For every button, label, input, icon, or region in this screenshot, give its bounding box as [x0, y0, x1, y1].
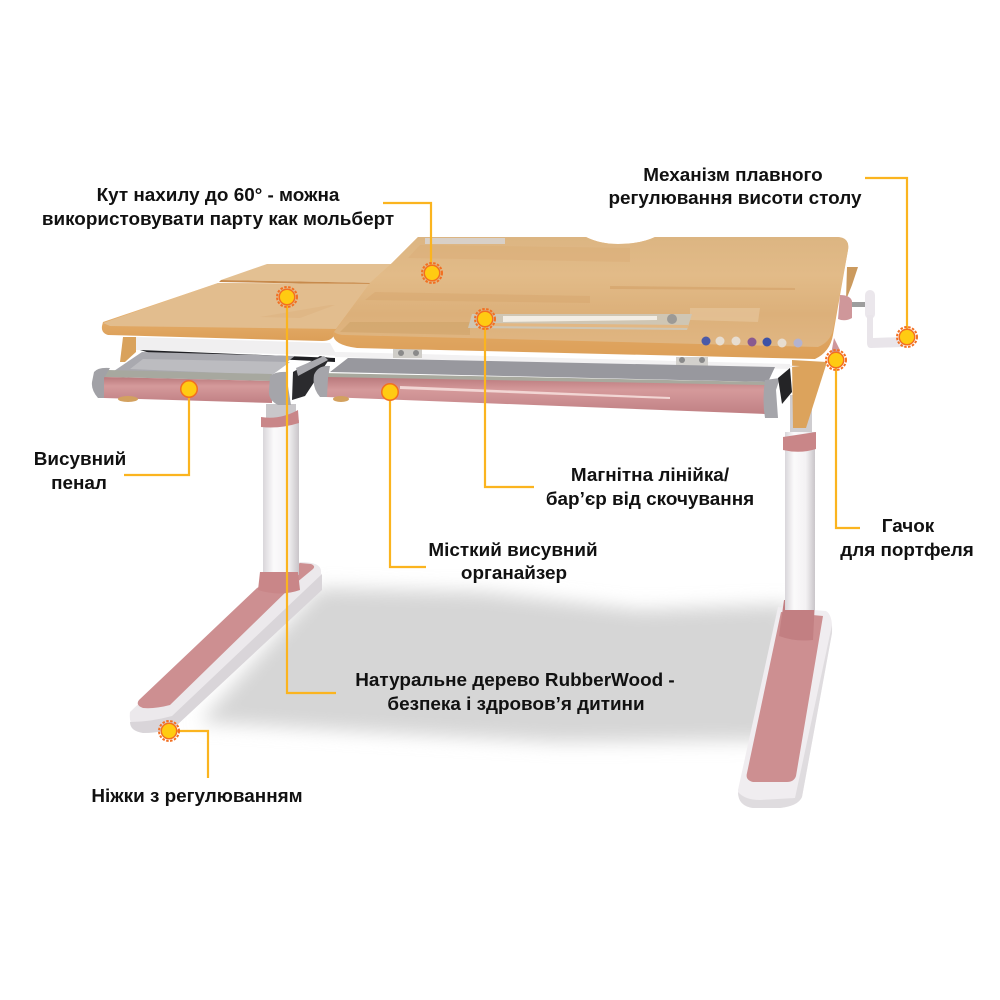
- marker: tilt: [422, 263, 442, 283]
- right tilted tabletop: [333, 237, 848, 359]
- label: tilt angle: використовувати парту как мольберт: [42, 209, 394, 230]
- left drawer: [92, 352, 330, 405]
- marker: organizer: [381, 383, 399, 401]
- backpack hook: [830, 338, 840, 360]
- marker: ruler: [475, 309, 495, 329]
- marker: hook: [826, 350, 846, 370]
- label: pencil case: Висувний: [34, 449, 126, 470]
- white under-rail: [136, 337, 800, 369]
- label: magnetic ruler: бар’єр від скочування: [546, 489, 754, 510]
- left leg and foot: [130, 404, 322, 733]
- wood brackets: [120, 267, 858, 428]
- marker: crank: [897, 327, 917, 347]
- label: natural wood: безпека і здровов’я дитини: [387, 694, 645, 715]
- label: organizer: органайзер: [461, 563, 567, 584]
- left tabletop: [102, 283, 385, 341]
- label: pencil case: пенал: [51, 473, 107, 494]
- label: natural wood: Натуральне дерево RubberWood -: [355, 670, 675, 691]
- label: tilt angle: Кут нахилу до 60° - можна: [97, 185, 340, 206]
- label: magnetic ruler: Магнітна лінійка/: [571, 465, 730, 486]
- label: backpack hook: для портфеля: [840, 540, 974, 561]
- marker: pencil case: [180, 380, 198, 398]
- marker: feet: [159, 721, 179, 741]
- desk illustration: [92, 237, 904, 808]
- marker: natural wood: [277, 287, 297, 307]
- magnetic ruler: [468, 314, 692, 330]
- sticker labels: [425, 238, 802, 348]
- label: height mechanism: Механізм плавного: [643, 165, 823, 186]
- floor shadow: [200, 588, 790, 742]
- label: organizer: Місткий висувний: [428, 540, 598, 561]
- callout lines: [124, 178, 907, 778]
- right leg and foot: [738, 395, 832, 808]
- height crank: [838, 290, 904, 348]
- rear flap: [219, 264, 398, 285]
- label: backpack hook: Гачок: [882, 516, 935, 537]
- right drawer: [314, 358, 792, 418]
- label: adjustable feet: Ніжки з регулюванням: [91, 786, 303, 807]
- label: height mechanism: регулювання висоти столу: [608, 188, 862, 209]
